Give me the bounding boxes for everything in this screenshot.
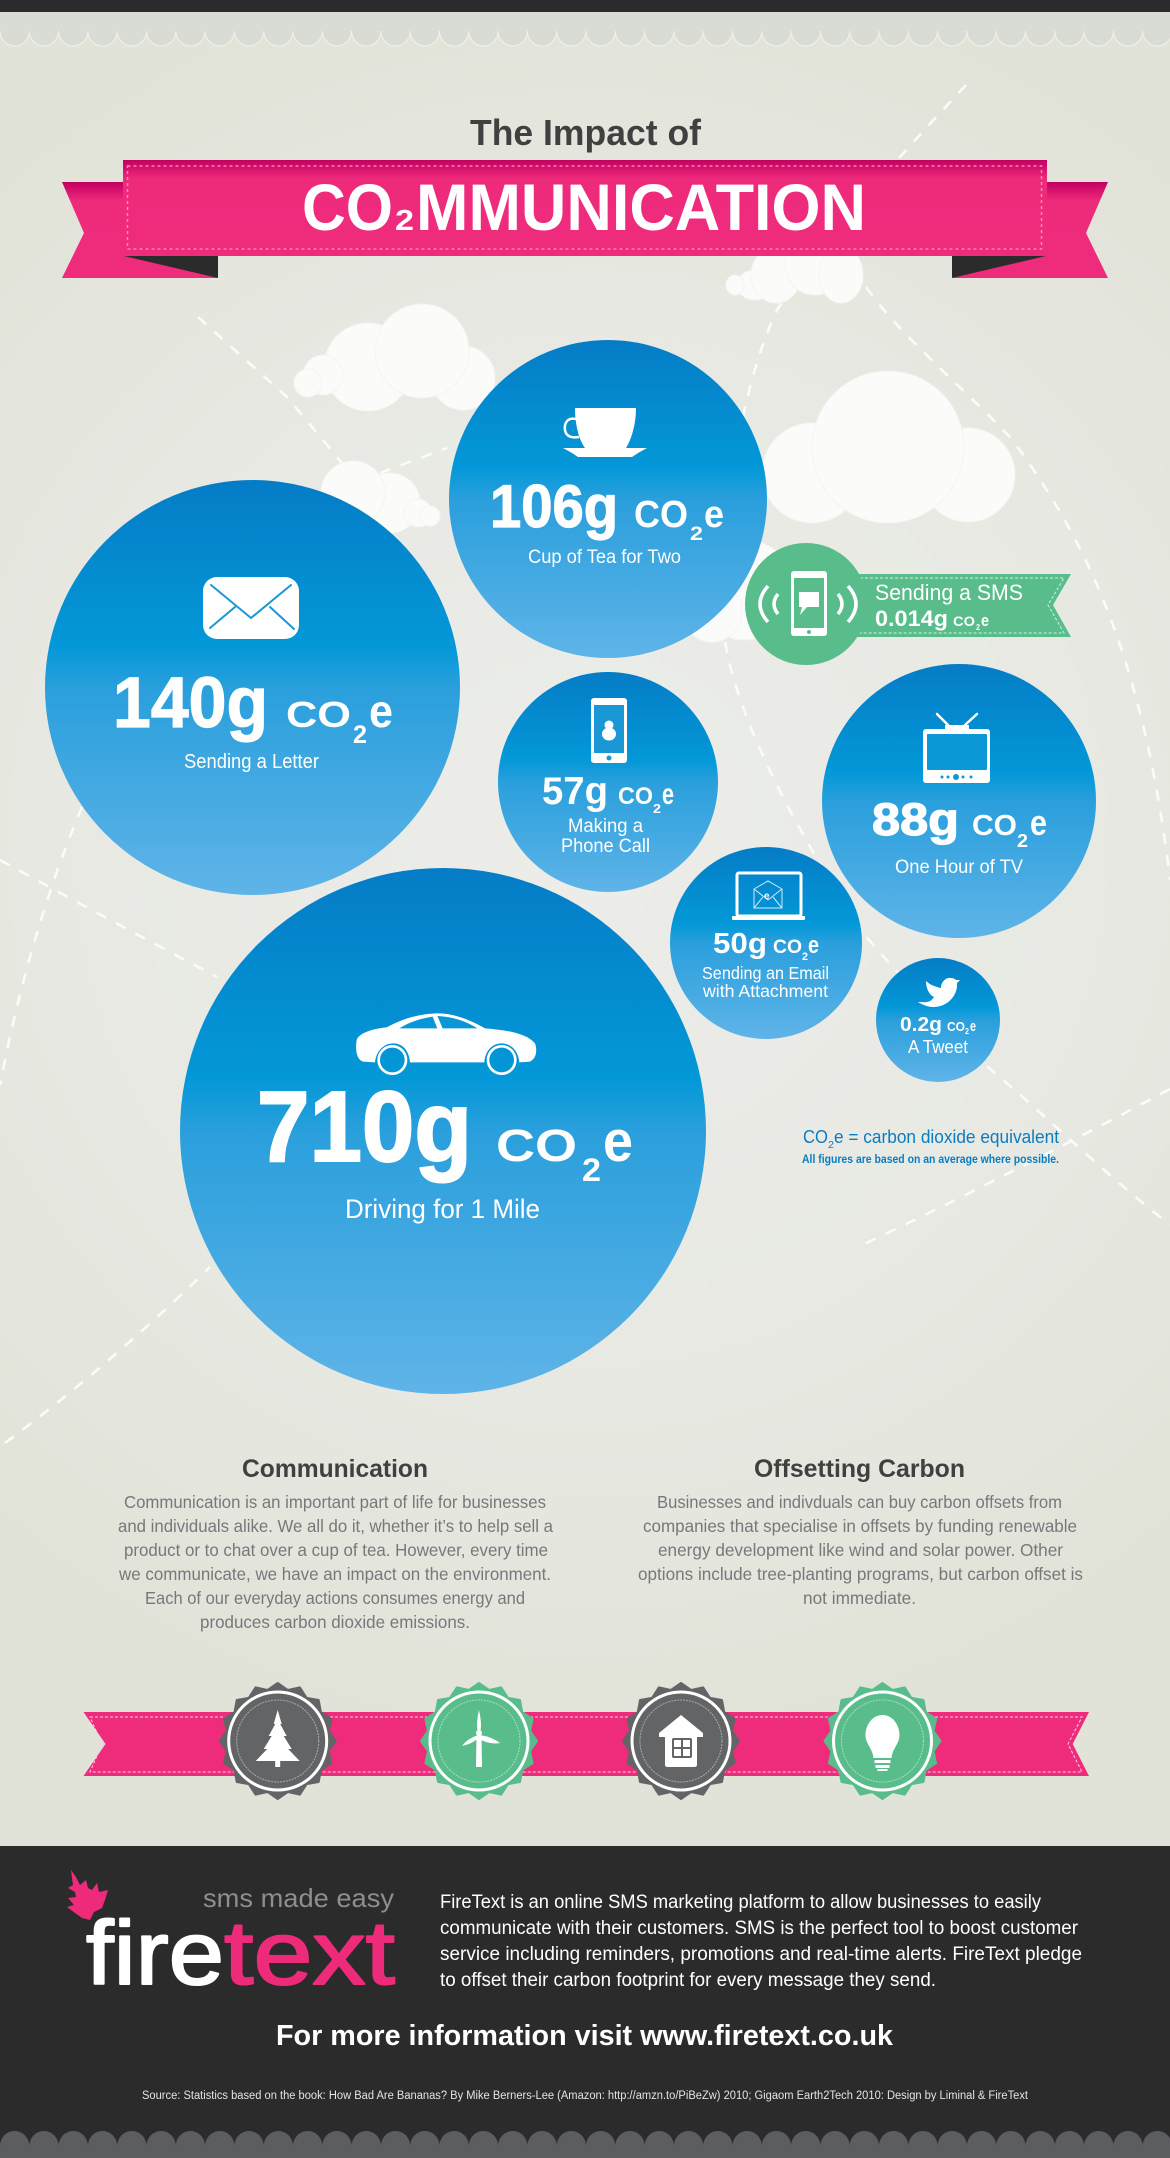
value: 2 — [690, 524, 703, 545]
company text: to offset their carbon footprint for every message they send. — [440, 1970, 936, 1991]
sms ribbon — [830, 574, 1071, 637]
value: e — [662, 778, 674, 811]
value: e — [603, 1109, 633, 1174]
top border with scallops — [0, 0, 1170, 47]
banner — [62, 160, 1108, 278]
value: 50g — [713, 928, 767, 960]
company text: service including reminders, promotions and real-time alerts. FireText pledge — [440, 1944, 1082, 1965]
text block: offsetting carbon: Businesses and indivduals can buy carbon offsets from — [657, 1492, 1062, 1512]
icon: laptop with envelope — [732, 873, 805, 920]
sms label: Sending a SMS — [875, 580, 1023, 605]
company text: communicate with their customers. SMS is the perfect tool to boost customer — [440, 1918, 1079, 1939]
label: Phone Call — [561, 836, 650, 857]
value: 2 — [582, 1152, 601, 1188]
badge: wind turbine — [421, 1683, 537, 1799]
value: 88g — [872, 794, 959, 845]
legend: e = carbon dioxide equivalent — [834, 1127, 1059, 1147]
clouds — [294, 235, 1015, 642]
value — [113, 664, 393, 749]
value — [490, 473, 724, 545]
logo — [67, 1870, 395, 2004]
legend: All figures are based on an average where possible. — [802, 1154, 1059, 1166]
value: 710g — [257, 1071, 472, 1183]
label: Cup of Tea for Two — [528, 547, 681, 568]
icon: smartphone signal — [760, 571, 856, 636]
text block: offsetting carbon — [638, 1492, 1083, 1608]
value: 2 — [1017, 831, 1028, 851]
label: A Tweet — [908, 1037, 968, 1057]
ribbon with badges — [84, 1683, 1089, 1799]
text block: offsetting carbon: options include tree-planting programs, but carbon offset is — [638, 1564, 1083, 1584]
dashed flight paths — [0, 85, 1170, 1443]
text block: communication: product or to chat over a cup of tea. However, every time — [124, 1540, 548, 1560]
value: e — [704, 494, 724, 536]
bubble: cup of tea — [449, 340, 767, 658]
label: with Attachment — [702, 981, 828, 1001]
label — [702, 963, 829, 1001]
text block: offsetting carbon: companies that specialise in offsets by funding renewable — [643, 1516, 1077, 1536]
icon: bird — [918, 978, 960, 1007]
value: e — [1030, 802, 1047, 843]
company text: FireText is an online SMS marketing platform to allow businesses to easily — [440, 1892, 1041, 1913]
banner title: MMUNICATION — [416, 170, 866, 244]
label: Making a — [568, 816, 643, 837]
icon: tea cup — [563, 408, 647, 457]
value: 2 — [353, 721, 367, 749]
value: CO — [618, 783, 653, 810]
bubble: driving — [180, 868, 706, 1394]
sms label: 2 — [976, 623, 980, 632]
value — [713, 928, 819, 963]
badge: house — [623, 1683, 739, 1799]
logo: text — [224, 1904, 395, 2004]
text block: communication: Each of our everyday actions consumes energy and — [145, 1588, 525, 1608]
legend: CO — [803, 1127, 828, 1147]
badge: light bulb — [824, 1683, 940, 1799]
icon: television — [923, 714, 990, 783]
value: CO — [773, 937, 802, 958]
text block: communication: we communicate, we have an impact on the environment. — [118, 1564, 551, 1584]
label: Sending a Letter — [184, 751, 319, 773]
bubble: sms — [745, 543, 1071, 665]
bubble: tv — [822, 664, 1096, 938]
value: e — [808, 932, 819, 959]
logo: fire — [86, 1904, 224, 2004]
value: e — [369, 685, 393, 737]
value — [872, 794, 1047, 851]
text block: communication — [118, 1492, 553, 1632]
heading: communication: Communication — [242, 1455, 428, 1483]
title: The Impact of — [470, 112, 702, 153]
value: 2 — [653, 801, 661, 816]
sms label: 0.014g — [875, 606, 948, 631]
text block: communication: Communication is an important part of life for businesses — [124, 1492, 546, 1512]
bubble: phone call — [498, 672, 718, 892]
call to action: For more information visit www.firetext.co.uk — [276, 2020, 894, 2052]
value: CO — [496, 1120, 577, 1171]
bubble: tweet — [876, 958, 1000, 1082]
text block: offsetting carbon: energy development like wind and solar power. Other — [658, 1540, 1063, 1560]
source: Source: Statistics based on the book: How Bad Are Bananas? By Mike Berners-Lee (Amazon: http://amzn.to/PiBeZw) 2010; Gigaom Earth2Tech 2010: Design by Liminal & FireText — [142, 2090, 1029, 2102]
bubble: email — [670, 847, 862, 1039]
label: Driving for 1 Mile — [345, 1194, 540, 1224]
banner title: CO — [302, 170, 393, 244]
value: 2 — [802, 951, 808, 963]
icon: car — [356, 1013, 536, 1074]
value — [257, 1071, 633, 1188]
label — [561, 816, 650, 857]
value: CO — [634, 494, 688, 536]
value: 0.2g — [900, 1014, 942, 1036]
value: 57g — [542, 770, 608, 813]
company text — [440, 1892, 1082, 1991]
value — [900, 1014, 976, 1036]
icon: laptop with envelope: e — [764, 891, 770, 902]
value — [542, 770, 674, 816]
logo: sms made easy — [203, 1883, 394, 1913]
legend — [802, 1127, 1059, 1166]
bubble: sending a letter — [45, 480, 460, 895]
value: e — [970, 1018, 976, 1035]
legend: 2 — [828, 1140, 834, 1151]
value: CO — [947, 1019, 965, 1034]
value: 106g — [490, 473, 618, 540]
sms label: CO — [953, 613, 975, 629]
sms label: e — [981, 611, 989, 630]
footer — [0, 1846, 1170, 2158]
text block: offsetting carbon: not immediate. — [803, 1588, 916, 1608]
value: CO — [286, 694, 351, 735]
heading: offsetting carbon: Offsetting Carbon — [754, 1455, 965, 1483]
label: Sending an Email — [702, 963, 829, 983]
icon: phone — [591, 698, 627, 763]
text block: communication: produces carbon dioxide emissions. — [200, 1612, 470, 1632]
value: CO — [972, 810, 1017, 842]
sms label — [875, 580, 1023, 632]
banner title: 2 — [395, 205, 414, 237]
value: 2 — [965, 1027, 969, 1036]
text block: communication: and individuals alike. We all do it, whether it’s to help sell a — [118, 1516, 553, 1536]
badge: tree — [220, 1683, 336, 1799]
label: One Hour of TV — [895, 857, 1023, 878]
value: 140g — [113, 664, 268, 743]
icon: envelope — [203, 577, 299, 639]
